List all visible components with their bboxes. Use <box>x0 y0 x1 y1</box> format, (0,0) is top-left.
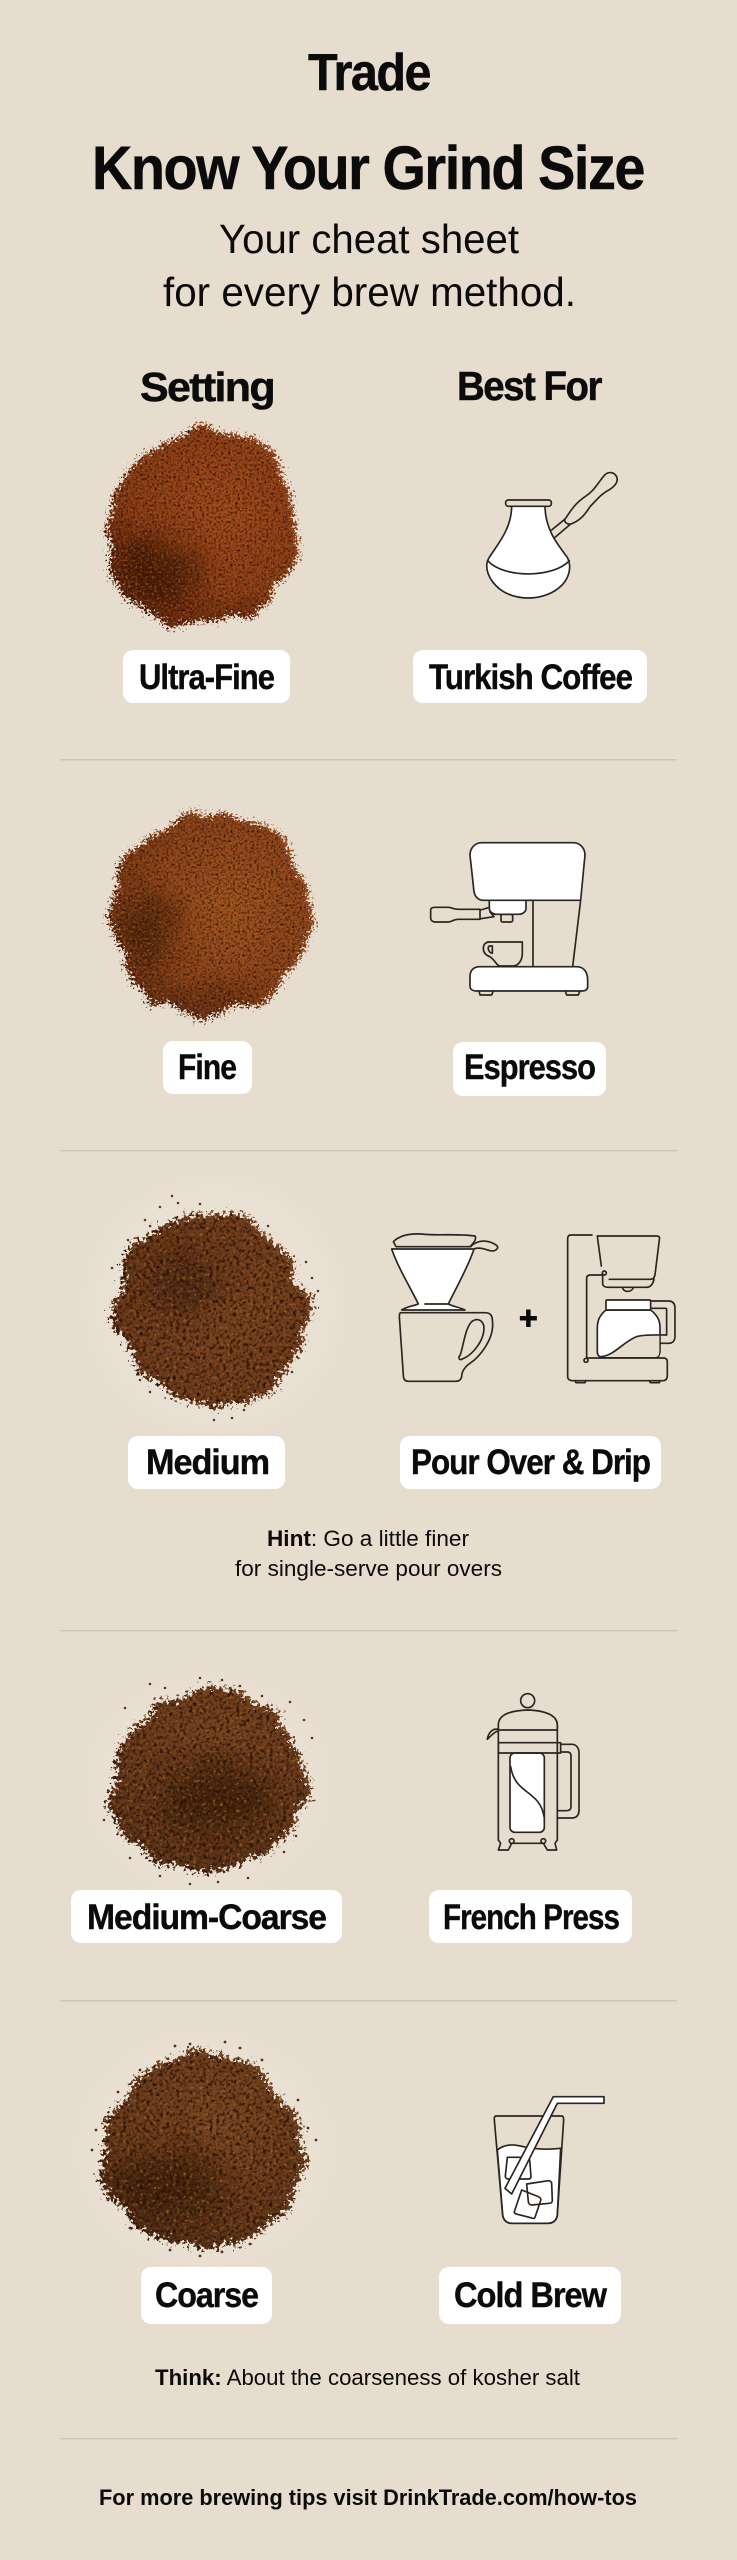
label: Pour Over & Drip <box>400 1436 661 1489</box>
label: Medium: Medium <box>146 1443 269 1482</box>
column heading: Best For: Best For <box>457 363 603 409</box>
photo: ultra-fine grounds <box>101 429 299 627</box>
title: Know Your Grind Size <box>92 134 644 202</box>
label: Cold Brew: Cold Brew <box>454 2276 608 2315</box>
photo: fine grounds <box>110 814 310 1015</box>
icon: plus sign: + <box>519 1300 538 1336</box>
label: Espresso <box>453 1042 606 1096</box>
icon: espresso machine <box>431 843 588 995</box>
label: Fine: Fine <box>178 1048 237 1087</box>
label: Espresso: Espresso <box>464 1048 596 1087</box>
icon: turkish coffee pot <box>487 473 617 598</box>
panel: coarse row <box>80 2035 621 2390</box>
hint note <box>235 1526 502 1581</box>
specks: coarse grounds <box>92 2042 316 2256</box>
label: Turkish Coffee <box>413 650 647 703</box>
footer call to action: For more brewing tips visit DrinkTrade.com/how-tos <box>99 2485 637 2510</box>
label: Fine <box>163 1041 252 1094</box>
label: Medium-Coarse: Medium-Coarse <box>87 1898 327 1937</box>
label: Medium-Coarse <box>71 1890 342 1943</box>
column heading: Setting: Setting <box>140 364 274 410</box>
label: Turkish Coffee: Turkish Coffee <box>429 658 633 697</box>
label: French Press: French Press <box>443 1898 620 1937</box>
panel: medium-coarse row <box>71 1678 632 1943</box>
specks: medium-coarse grounds <box>104 1678 312 1884</box>
label: Pour Over & Drip: Pour Over & Drip <box>411 1443 650 1482</box>
label: French Press <box>429 1890 632 1943</box>
panel: medium row <box>90 1180 675 1581</box>
label: Cold Brew <box>439 2267 621 2324</box>
label: Ultra-Fine: Ultra-Fine <box>139 658 275 697</box>
panel: fine row <box>110 814 606 1096</box>
photo: medium grounds <box>115 1212 307 1406</box>
hint note: Hint: Go a little finer <box>267 1526 469 1551</box>
specks: medium grounds <box>112 1196 318 1420</box>
label: Coarse <box>141 2267 272 2324</box>
icon: cold brew glass <box>494 2097 604 2223</box>
think note: Think: About the coarseness of kosher salt <box>155 2365 580 2390</box>
subtitle: for every brew method. <box>163 269 576 315</box>
label: Ultra-Fine <box>123 650 290 703</box>
icon: pour over dripper and mug <box>392 1234 498 1381</box>
logo: Trade: Trade <box>308 44 431 102</box>
label: Medium <box>128 1436 285 1489</box>
icon: drip coffee machine <box>568 1235 675 1383</box>
icon: french press <box>487 1694 579 1850</box>
panel: ultra-fine row <box>101 429 647 703</box>
photo: coarse grounds <box>101 2054 303 2247</box>
subtitle <box>163 216 576 315</box>
hint note: for single-serve pour overs <box>235 1556 502 1581</box>
label: Coarse: Coarse <box>155 2276 259 2315</box>
subtitle: Your cheat sheet <box>219 216 520 262</box>
photo: medium-coarse grounds <box>111 1690 304 1871</box>
